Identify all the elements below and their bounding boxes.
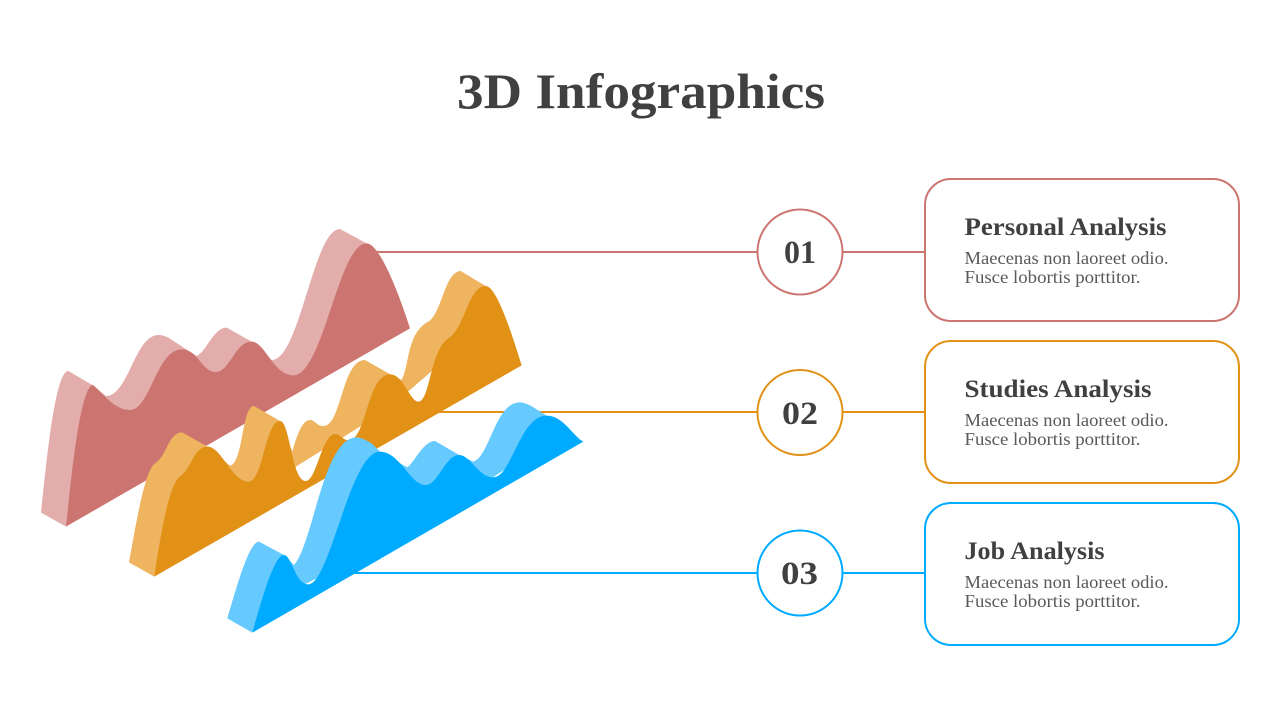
panel: Personal Analysis: Fusce lobortis porttitor. (964, 267, 1140, 287)
3D chart: orange wave (129, 271, 522, 577)
badge 02: 02 (782, 396, 818, 432)
panel: Job Analysis: Fusce lobortis porttitor. (964, 591, 1140, 611)
panel: Personal Analysis: Personal Analysis (964, 214, 1167, 241)
3D chart: blue wave (227, 402, 583, 633)
panel: Job Analysis: Maecenas non laoreet odio. (964, 572, 1168, 592)
panel: Studies Analysis: Fusce lobortis porttitor. (964, 429, 1140, 449)
connector: blue (350, 572, 925, 574)
badge 01 (758, 210, 842, 294)
badge 03 (758, 530, 842, 616)
panel: Personal Analysis (925, 179, 1239, 321)
badge 02 (758, 370, 842, 455)
panel: Job Analysis (925, 503, 1239, 645)
3D chart: red wave (41, 229, 410, 527)
panel: Studies Analysis: Maecenas non laoreet odio. (964, 410, 1168, 430)
connector: red (370, 251, 925, 253)
connector: orange (430, 411, 925, 413)
badge 03: 03 (781, 556, 818, 592)
badge 01: 01 (784, 235, 816, 271)
panel: Personal Analysis: Maecenas non laoreet odio. (964, 248, 1168, 268)
panel: Studies Analysis: Studies Analysis (964, 376, 1152, 403)
panel: Studies Analysis (925, 341, 1239, 483)
title: 3D Infographics (457, 63, 825, 119)
panel: Job Analysis: Job Analysis (964, 538, 1105, 565)
